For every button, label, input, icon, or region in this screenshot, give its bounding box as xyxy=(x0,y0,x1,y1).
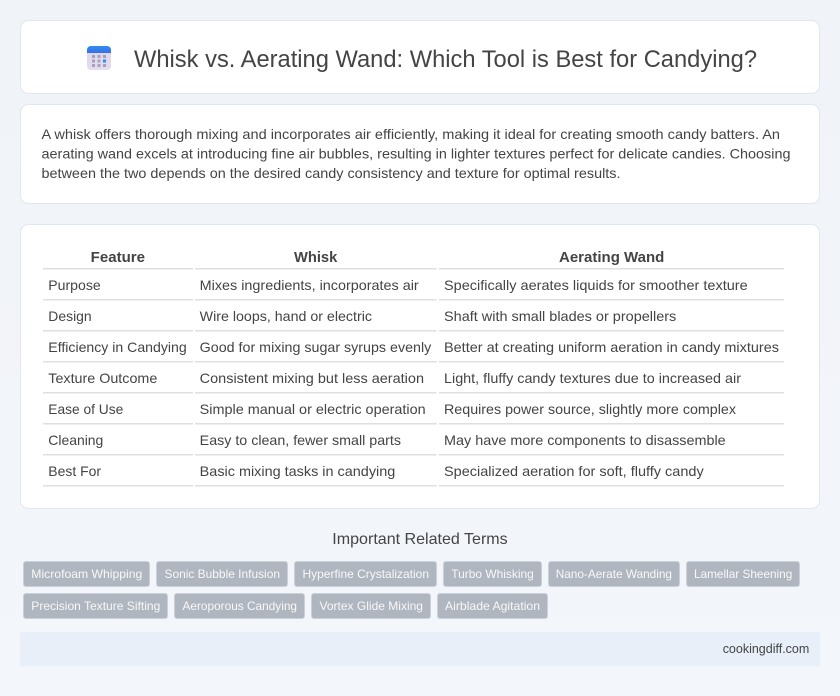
table header row: Feature xyxy=(91,249,145,266)
table row: Ease of Use: Simple manual or electric operation xyxy=(200,401,426,417)
table header row: Aerating Wand xyxy=(559,249,664,266)
heading: Important Related Terms: Important Related Terms xyxy=(332,531,508,548)
tag: Airblade Agitation xyxy=(438,594,548,618)
tag: Nano-Aerate Wanding xyxy=(548,562,680,586)
table row: Texture Outcome: Light, fluffy candy textures due to increased air xyxy=(444,370,741,386)
tag: Sonic Bubble Infusion xyxy=(156,562,288,586)
panel: description xyxy=(20,104,820,204)
table header row: Whisk xyxy=(294,249,338,266)
panel: comparison table xyxy=(20,224,820,508)
footer source text: cookingdiff.com xyxy=(723,641,809,656)
tag: Hyperfine Crystalization: Hyperfine Crystalization xyxy=(302,567,429,581)
tag: Hyperfine Crystalization xyxy=(294,562,436,586)
table row: Best For: Specialized aeration for soft, fluffy candy xyxy=(444,463,704,479)
tag: Sonic Bubble Infusion: Sonic Bubble Infusion xyxy=(164,567,280,581)
tag: Airblade Agitation: Airblade Agitation xyxy=(445,599,540,613)
table row: Texture Outcome xyxy=(43,370,784,394)
table row: Ease of Use: Ease of Use xyxy=(48,401,124,417)
tag: Precision Texture Sifting: Precision Texture Sifting xyxy=(31,599,160,613)
footer bar xyxy=(20,632,820,666)
table row: Cleaning: May have more components to disassemble xyxy=(444,432,726,448)
tag: Vortex Glide Mixing: Vortex Glide Mixing xyxy=(320,599,423,613)
icon: calendar xyxy=(87,46,111,70)
text block: summary: A whisk offers thorough mixing and incorporates air efficiently, making it ideal for creating smooth candy batters. An xyxy=(42,126,780,142)
table row: Efficiency in Candying: Efficiency in Candying xyxy=(48,339,187,355)
tag: Lamellar Sheening xyxy=(686,562,800,586)
table row: Ease of Use xyxy=(43,401,784,424)
table row: Design xyxy=(43,308,784,332)
tag: Microfoam Whipping xyxy=(24,562,150,586)
table row: Best For: Basic mixing tasks in candying xyxy=(200,463,395,479)
tag group: related terms xyxy=(24,562,800,618)
table row: Efficiency in Candying: Better at creating uniform aeration in candy mixtures xyxy=(444,339,779,355)
table row: Best For xyxy=(43,463,784,486)
table row: Best For: Best For xyxy=(48,463,101,479)
table header row xyxy=(43,249,784,270)
text block: summary: between the two depends on the desired candy consistency and texture for optimal results. xyxy=(42,165,620,181)
tag: Aeroporous Candying xyxy=(174,594,304,618)
table row: Cleaning: Cleaning xyxy=(48,432,103,448)
table row: Texture Outcome: Texture Outcome xyxy=(48,370,158,386)
table row: Design: Shaft with small blades or propellers xyxy=(444,308,676,324)
table row: Cleaning xyxy=(43,432,784,456)
tag: Nano-Aerate Wanding: Nano-Aerate Wanding xyxy=(556,567,672,581)
table row: Purpose: Specifically aerates liquids for smoother texture xyxy=(444,277,748,293)
tag: Lamellar Sheening: Lamellar Sheening xyxy=(694,567,792,581)
table row: Design: Design xyxy=(48,308,92,324)
table row: Cleaning: Easy to clean, fewer small parts xyxy=(200,432,401,448)
tag: Aeroporous Candying: Aeroporous Candying xyxy=(182,599,297,613)
table row: Purpose xyxy=(43,277,784,300)
tag: Microfoam Whipping: Microfoam Whipping xyxy=(31,567,142,581)
tag: Turbo Whisking xyxy=(444,562,542,586)
tag: Precision Texture Sifting xyxy=(24,594,168,618)
tag: Vortex Glide Mixing xyxy=(312,594,430,618)
tag: Turbo Whisking: Turbo Whisking xyxy=(451,567,534,581)
table row: Texture Outcome: Consistent mixing but less aeration xyxy=(200,370,424,386)
panel: header xyxy=(20,20,820,94)
table row: Purpose: Purpose xyxy=(48,277,101,293)
text block: summary xyxy=(42,126,791,181)
table row: Efficiency in Candying: Good for mixing sugar syrups evenly xyxy=(200,339,431,355)
table row: Efficiency in Candying xyxy=(43,339,784,362)
table row: Design: Wire loops, hand or electric xyxy=(200,308,372,324)
table row: Purpose: Mixes ingredients, incorporates air xyxy=(200,277,419,293)
title: Whisk vs. Aerating Wand: Which Tool is Best for Candying? xyxy=(134,46,757,73)
text block: summary: aerating wand excels at introducing fine air bubbles, resulting in lighter textures perfect for delicate candies. Choosing xyxy=(42,146,791,162)
table row: Ease of Use: Requires power source, slightly more complex xyxy=(444,401,736,417)
